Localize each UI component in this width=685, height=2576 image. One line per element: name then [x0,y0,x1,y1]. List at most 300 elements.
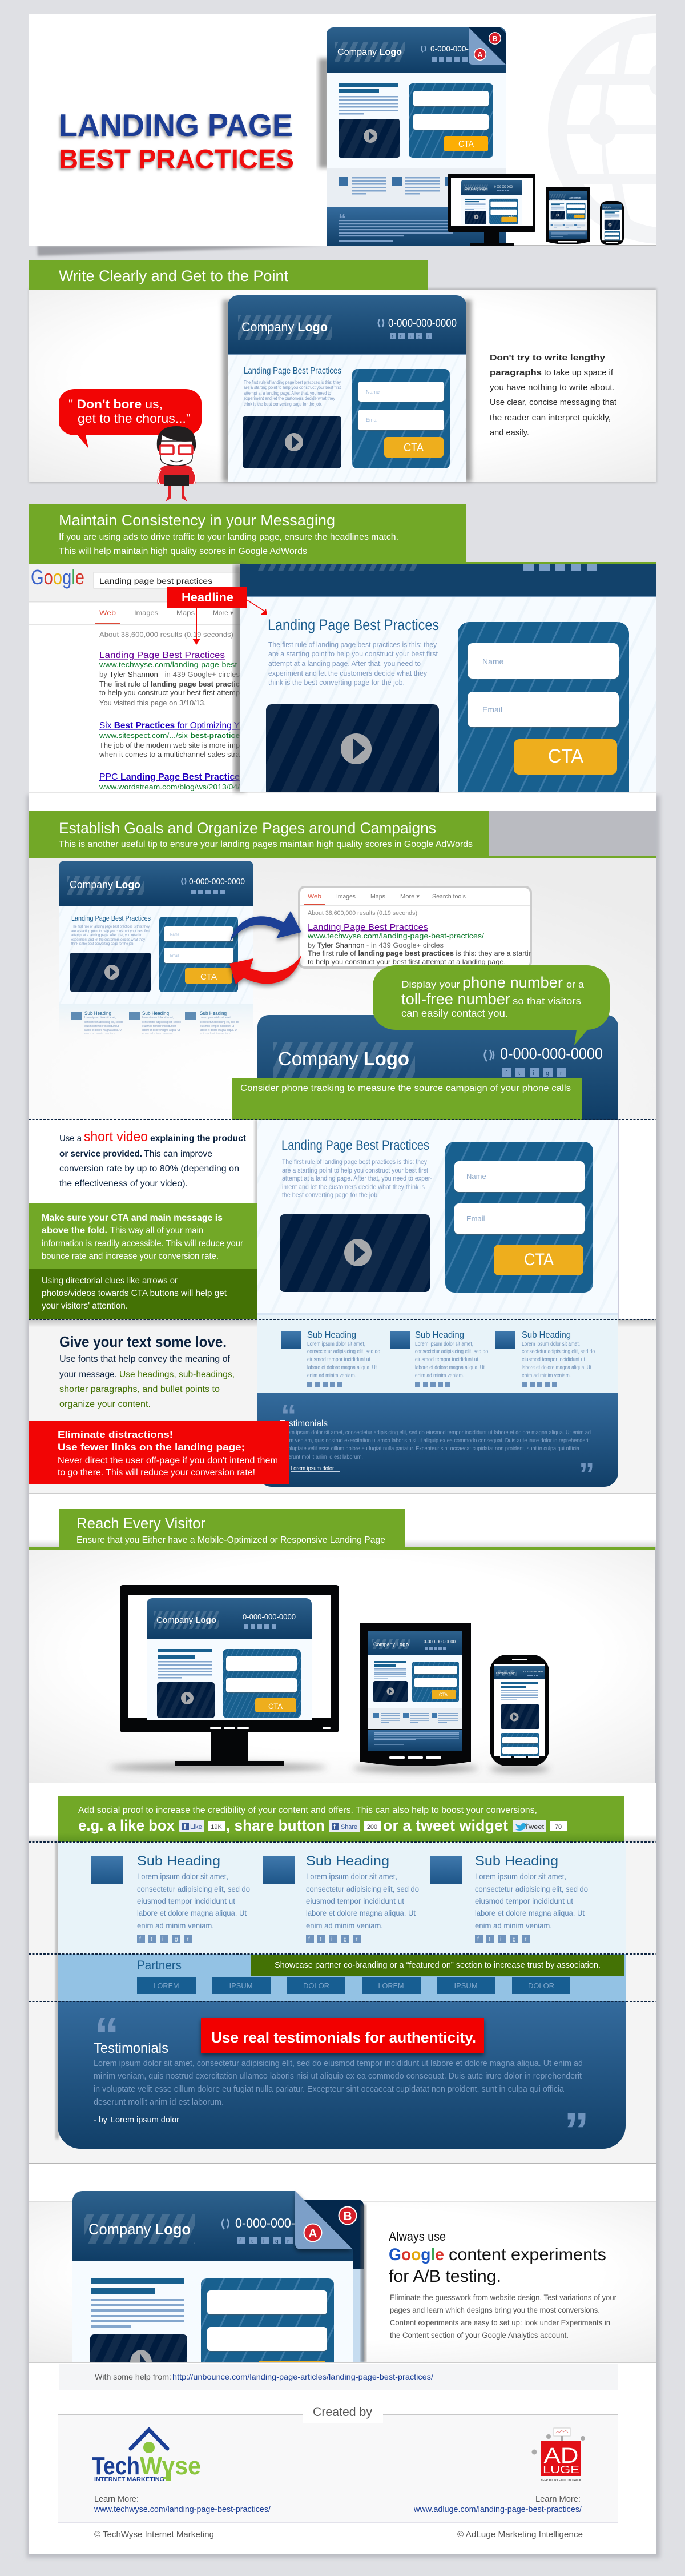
phone number speech bubble: phone number [462,974,563,991]
ab testing paragraph: Eliminate the guesswork from website design. Test variations of your [390,2293,616,2302]
sources box: http://unbounce.com/landing-page-articles/landing-page-best-practices/ [172,2372,433,2381]
google search results screenshot: You visited this page on 3/10/13. [99,699,206,707]
short video tip: This can improve [144,1149,212,1159]
small landing page mock: think is the best converting page for the job. [71,942,134,946]
bottom rule [29,1493,656,1494]
mock body column: Email [466,1214,485,1223]
sub heading columns: consectetur adipisicing elit, sed do [307,1349,380,1355]
landing page mock: CTA [404,442,424,454]
small landing page mock: Sub Heading [84,1010,111,1016]
like button widget [179,1820,225,1832]
short video tip: Use a [59,1134,82,1143]
share button widget: f [333,1823,336,1831]
sub heading columns [257,1319,618,1393]
sources box [59,2364,618,2390]
desktop monitor: 0-000-000-0000 [243,1612,296,1621]
search result card: www.techwyse.com/landing-page-best-practices/ [307,932,485,940]
paragraph: lengthy paragraphs: the reader can interpret quickly, [490,414,611,423]
testimonials block: - by [94,2115,107,2125]
text love tip: shorter paragraphs, and bullet points to [59,1385,220,1394]
google search results screenshot: Landing Page Best Practices [99,651,225,660]
variant badge A [474,48,486,61]
paragraph: lengthy paragraphs [490,354,616,438]
hero monitor: Company Logo [465,187,487,191]
learn more adluge [413,2494,582,2514]
sub heading columns: eiusmod tempor incididunt ut [522,1357,585,1363]
hero cast shadow [37,246,327,256]
section heading tab [29,811,656,858]
testimonials footer [257,1393,618,1492]
testimonials footer: minim veniam, quis nostrud exercitation ullamco laboris nisi ut aliquip ex ea commodo consequat. Duis aute irure dolor in reprehenderit [280,1438,590,1444]
panel: ab testing [29,2191,656,2363]
sub heading columns: consectetur adipisicing elit, sed do [522,1349,595,1355]
learn more techwyse: www.techwyse.com/landing-page-best-practices/ [94,2505,271,2514]
small landing page mock: enim ad minim veniam. [84,1032,116,1036]
eliminate distractions callout: Never direct the user off-page if you don't intend them [58,1456,278,1466]
sub headings band: Sub Heading [137,1853,220,1869]
google search results screenshot: Images [134,609,158,617]
learn more techwyse: Learn More: [94,2494,139,2504]
smartphone: Company Logo [496,1672,515,1675]
small landing page mock: Lorem ipsum dolor sit amet, [142,1016,174,1020]
large company header mock: Company Logo [278,1048,409,1070]
sub heading columns: Lorem ipsum dolor sit amet, [522,1341,580,1347]
eliminate distractions callout: Use fewer links on the landing page; [58,1442,245,1452]
section top shadow [29,1319,656,1327]
landing page mock: Landing Page Best Practices [244,366,341,376]
section heading tab: Ensure that you Either have a Mobile-Optimized or Responsive Landing Page [76,1535,385,1545]
small landing page mock [59,861,253,1040]
google search results screenshot: Six Best Practices for Optimizing Y [99,721,240,731]
created by label: Created by [313,2405,372,2419]
paragraph: lengthy paragraphs: and easily. [490,428,529,438]
testimonials block: Lorem ipsum dolor [111,2115,179,2125]
section heading tab: If you are using ads to drive traffic to your landing page, ensure the headlines match. [59,532,398,542]
like button widget: Like [190,1824,202,1831]
learn more adluge: www.adluge.com/landing-page-best-practices/ [413,2505,582,2514]
fold tip: This way all of your main [110,1226,203,1235]
learn more adluge: Learn More: [535,2494,581,2504]
google search results screenshot: by Tyler Shannon - in 439 Google+ circles [99,671,240,679]
ab testing paragraph: the Content section of your Google Analytics account. [390,2330,569,2340]
ab testing headline [389,2229,606,2286]
sub headings band: Sub Heading [306,1853,389,1869]
small landing page mock: consectetur adipisicing elit, sed do [142,1021,181,1024]
google search results screenshot: PPC Landing Page Best Practice [99,772,240,782]
fold tip: information is readily accessible. This will reduce your [42,1239,243,1249]
mock body column: CTA [524,1250,554,1269]
search result card: Web [308,893,321,900]
google search results screenshot: when it comes to a multichannel sales stra [99,751,240,759]
desktop monitor [120,1585,339,1766]
character with glasses [157,426,196,501]
large landing page mock: Landing Page Best Practices [268,616,439,633]
panel: write clearly [29,260,656,501]
social proof banner: or a tweet widget [383,1817,508,1834]
paragraph: lengthy paragraphs: you have nothing to write about. [490,383,615,392]
text love tip: Use headings, sub-headings, [119,1370,235,1379]
large landing page mock: CTA [548,745,583,767]
hero landing page mock shadow [319,58,330,168]
page section: sub headings partners testimonials [29,1842,656,2164]
small landing page mock: consectetur adipisicing elit, sed do [84,1021,123,1024]
red curved arrow [229,955,301,984]
sub headings band: Lorem ipsum dolor sit amet, [306,1872,397,1881]
social proof banner [58,1796,624,1842]
sub heading columns: eiusmod tempor incididunt ut [415,1357,478,1363]
mock body column: attempt at a landing page. After that, you need to exper- [282,1174,432,1182]
panel background [29,1550,655,1783]
sub heading columns: Lorem ipsum dolor sit amet, [307,1341,365,1347]
search result card: Maps [370,893,385,900]
co-branding strip: Showcase partner co-branding or a “featured on” section to increase trust by association. [275,1960,601,1970]
sub headings band: labore et dolore magna aliqua. Ut [137,1908,247,1917]
hero monitor [448,174,535,246]
sub headings band: consectetur adipisicing elit, sed do [137,1884,250,1893]
creators background [58,2414,618,2523]
text love tip: organize your content. [59,1399,151,1409]
hero baseline rule [514,245,656,246]
small landing page mock: enim ad minim veniam. [200,1032,231,1036]
sub headings band [58,1842,626,1954]
search result card: to help you construct your best first attempt at a landing page. [308,958,506,966]
phone number speech bubble: can easily contact you. [401,1008,508,1019]
white panel background [29,564,656,811]
paragraph: lengthy paragraphs: Don't try to write lengthy [490,354,605,363]
sub headings band: consectetur adipisicing elit, sed do [475,1884,588,1893]
sub headings band: ftigr [139,1936,189,1943]
section heading tab: Maintain Consistency in your Messaging [59,512,335,529]
testimonials footer: deserunt mollit anim id est laborum. [280,1454,363,1460]
panel: short video and fold [29,1120,656,1319]
sub heading columns: Lorem ipsum dolor sit amet, [415,1341,473,1347]
hero phone [600,201,624,245]
landing page mock: are a starting point to help you construct your best first [244,385,341,390]
panel: reach every visitor [29,1494,656,1783]
fold tip: Make sure your CTA and main message is [42,1213,223,1223]
mock body column: The first rule of landing page best practices is this: they [282,1158,427,1166]
ab testing headline: for A/B testing. [389,2267,501,2286]
white header band [29,1494,656,1547]
search result card: Landing Page Best Practices [308,922,428,932]
testimonials footer: Lorem ipsum dolor sit amet, consectetur adipisicing elit, sed do eiusmod tempor incididunt ut labore et dolore magna aliqua. Ut enim ad [280,1430,591,1436]
fold tip: bounce rate and increase your conversion rate. [42,1251,219,1261]
partners band: Partners [137,1958,182,1972]
section heading tab: Establish Goals and Organize Pages around Campaigns [59,820,436,837]
hero phone: Company Logo [603,207,611,209]
section heading tab [29,1509,655,1550]
small landing page mock: The first rule of landing page best practices is this: they [71,925,150,929]
hero landing page mock [327,27,506,246]
variant badge A: A [308,2227,317,2240]
small landing page mock: labore et dolore magna aliqua. Ut [142,1029,180,1032]
ab landing page mock [72,2191,353,2362]
partners band: IPSUM [229,1981,252,1990]
search result card: Images [336,893,356,900]
tablet: CTA [439,1692,448,1698]
search result card: The first rule of landing page best practices is this: they are a startir [308,949,531,957]
landing page mock: Company Logo [241,320,328,334]
hero monitor: 0-000-000-0000 [494,186,513,189]
eliminate distractions callout: Eliminate distractions! [58,1429,173,1440]
smartphone [490,1655,549,1766]
search result card: Search tools [432,893,466,900]
text love tip: your message. [59,1370,117,1379]
hero title [59,107,294,175]
testimonials footer: in voluptate velit esse cillum dolore eu fugiat nulla pariatur. Excepteur sint occaecat cupidatat non proident, sunt in culpa qui officia [280,1446,579,1452]
sub heading columns: labore et dolore magna aliqua. Ut [307,1365,377,1371]
like button widget: f [184,1823,187,1831]
small landing page mock: Sub Heading [200,1010,227,1016]
band shadow [29,1835,656,1842]
testimonials block: Testimonials [94,2040,168,2056]
small landing page mock: Sub Heading [142,1010,169,1016]
small landing page mock: Lorem ipsum dolor sit amet, [84,1016,116,1020]
variant badge A [304,2223,322,2242]
large company header mock: 0-000-000-0000 [500,1045,603,1062]
google search results screenshot: Web [99,609,116,617]
blue curved arrow [230,911,301,941]
learn more techwyse [94,2494,271,2514]
arrow to page headline [247,600,267,615]
hero landing page mock: CTA [458,139,474,149]
short video tip: or service provided. [59,1149,142,1159]
text love tip [59,1333,235,1409]
side gray background [29,1842,656,2163]
large landing page mock: The first rule of landing page best practices is this: they [268,641,437,649]
sub headings band: ftigr [308,1936,358,1943]
fold tip: above the fold. [42,1226,107,1235]
tweet button widget [513,1820,567,1832]
techwyse logo: Tech [92,2452,140,2480]
landing page mock: think is the best converting page for the job. [244,402,322,407]
column shadow [55,1842,59,2139]
google search results screenshot: to help you construct your best first attemp [99,689,240,697]
small landing page mock: Name [170,933,180,937]
ab landing page mock: 0-000-000- [235,2216,295,2230]
tweet button widget: Tweet [525,1824,544,1831]
desktop monitor: Company Logo [156,1615,216,1625]
small landing page mock: Landing Page Best Practices [71,914,151,922]
speech bubble [59,389,202,448]
white background [29,2363,656,2554]
small landing page mock: eiusmod tempor incididunt ut [142,1025,177,1028]
page B behind mock [304,2200,364,2362]
share button widget [329,1820,381,1832]
sub heading columns: enim ad minim veniam. [307,1373,356,1379]
small landing page mock: attempt at a landing page. After that, you need to [71,933,142,937]
small landing page mock: Email [170,954,179,958]
landing page mock: 0-000-000-0000 [388,318,457,330]
panel background [29,290,656,482]
sub heading columns: enim ad minim veniam. [415,1373,464,1379]
eliminate distractions callout [29,1421,289,1484]
variant badge B [338,2206,357,2225]
gray background [29,1319,656,1494]
hero monitor: CTA [509,215,514,218]
small landing page mock: Company Logo [70,879,140,890]
small landing page mock: enim ad minim veniam. [142,1032,174,1036]
short video tip: short video [84,1129,148,1145]
section heading tab: Write Clearly and Get to the Point [59,267,288,284]
testimonials block: deserunt mollit anim id est laborum. [94,2097,224,2107]
section heading tab [29,504,656,564]
hero tablet: Company Logo [550,198,566,201]
sub heading columns: labore et dolore magna aliqua. Ut [415,1365,485,1371]
sub headings band: enim ad minim veniam. [306,1921,383,1930]
sub headings band: consectetur adipisicing elit, sed do [306,1884,419,1893]
large landing page mock: Email [482,705,502,714]
sub headings band: Lorem ipsum dolor sit amet, [137,1872,228,1881]
variant badge A: A [477,50,483,59]
short video tip: the effectiveness of your video). [59,1179,188,1189]
techwyse logo [92,2430,201,2483]
sub heading columns: Sub Heading [522,1330,571,1340]
large company header mock [257,1015,618,1120]
variant badge B [489,32,501,45]
google search results screenshot: www.wordstream.com/blog/ws/2013/04/ [99,783,240,791]
hero panel [29,14,685,256]
sub heading columns: eiusmod tempor incididunt ut [307,1357,370,1363]
large landing page mock: think is the best converting page for the job. [268,679,405,687]
social proof banner: e.g. a like box [78,1817,175,1834]
section heading tab [29,260,428,290]
globe watermark [548,16,656,243]
sub headings band: labore et dolore magna aliqua. Ut [475,1908,585,1917]
techwyse logo: INTERNET MARKETING [94,2476,164,2483]
google search results screenshot: The job of the modern web site is more imp [99,741,240,749]
speech bubble: get to the chorus..." [78,411,191,426]
panel shadow [29,288,656,483]
headline callout [167,587,247,608]
sub headings band: eiusmod tempor incididunt ut [306,1896,404,1905]
paragraph: lengthy paragraphs: paragraphs [490,368,542,378]
search result card: About 38,600,000 results (0.19 seconds) [308,910,417,917]
creators bottom rule [58,2522,618,2523]
phone number speech bubble: or a [566,979,585,990]
panel background [29,858,656,1120]
panel: social proof [29,1783,656,1842]
ab testing paragraph: Content experiments are easy to set up: look under Experiments in [390,2318,610,2327]
mock shadow [234,564,245,792]
small landing page mock: 0-000-000-0000 [189,877,245,886]
eliminate distractions callout: to go there. This will reduce your conversion rate! [58,1468,255,1478]
landing page mock: attempt at a landing page. After that, you need to [244,391,331,396]
landing page mock: Email [366,417,379,423]
landing page mock shadow [223,300,472,482]
sub heading columns: enim ad minim veniam. [522,1373,571,1379]
phone tracking strip: Consider phone tracking to measure the source campaign of your phone calls [240,1084,571,1093]
mock body column: iment and let the customers decide what they think is [282,1183,425,1191]
ab landing page mock: Company Logo [88,2221,191,2238]
small landing page mock: labore et dolore magna aliqua. Ut [200,1029,238,1032]
section heading tab: This will help maintain high quality scores in Google AdWords [59,547,307,556]
adluge logo: AD [543,2444,579,2468]
short video tip [59,1129,246,1189]
tweet button widget: 70 [555,1824,562,1831]
desktop monitor: CTA [268,1702,283,1711]
partners band: LOREM [378,1981,404,1990]
paragraph: lengthy paragraphs: Use clear, concise messaging that [490,398,616,407]
like button widget: 19K [211,1824,222,1831]
sub heading columns: Sub Heading [415,1330,464,1340]
hero tablet [546,187,590,244]
google search results screenshot: The first rule of landing page best practic [99,680,240,688]
short video tip: conversion rate by up to 80% (depending on [59,1164,239,1174]
testimonials block: ” [564,2102,589,2158]
search result card [299,887,531,968]
google search results screenshot: Landing page best practices [99,576,212,585]
landing page mock: ftigr [392,334,429,339]
creators rule [58,2414,618,2415]
phone number speech bubble: so that visitors [513,996,581,1006]
section heading tab: Reach Every Visitor [76,1515,206,1532]
hero landing page mock: “ [339,210,346,227]
landing page mock [228,295,466,482]
small landing page mock: are a starting point to help you construct your best first [71,929,150,933]
testimonials block: minim veniam, quis nostrud exercitation ullamco laboris nisi ut aliquip ex ea commodo consequat. Duis aute irure dolor in reprehenderit [94,2071,582,2081]
section heading tab: This is another useful tip to ensure your landing pages maintain high quality scores in Google AdWords [59,840,473,849]
directional cues tip: your visitors' attention. [42,1301,128,1311]
ab testing headline: Always use [389,2229,446,2244]
google search results screenshot: www.techwyse.com/landing-page-best- [99,660,240,669]
hero title: LANDING PAGE [59,107,293,143]
sub headings band: Sub Heading [475,1853,558,1869]
small landing page mock: eiusmod tempor incididunt ut [200,1025,235,1028]
sub heading columns: labore et dolore magna aliqua. Ut [522,1365,591,1371]
large landing page mock: are a starting point to help you construct your best first [268,650,438,658]
hero landing page mock: Company Logo [337,47,402,57]
variant badge B: B [343,2210,352,2223]
testimonials footer: Testimonials [280,1419,328,1429]
sub headings band: enim ad minim veniam. [137,1921,214,1930]
directional cues tip [29,1269,257,1319]
large company header mock: ftigr [505,1070,562,1077]
white background [29,1120,656,1319]
phone number speech bubble: toll-free number [401,990,510,1008]
variant badge B: B [492,34,498,43]
real testimonials callout [201,2018,484,2053]
sub headings band: eiusmod tempor incididunt ut [475,1896,573,1905]
adluge logo: KEEP YOUR LEADS ON TRACK [541,2479,581,2482]
mock body column: are a starting point to help you construct your best first [282,1166,429,1174]
adluge logo [532,2428,585,2482]
sub headings band: eiusmod tempor incididunt ut [137,1896,235,1905]
share button widget: 200 [367,1824,377,1831]
dashed divider lines [29,1120,656,2001]
bottom rule [29,2362,656,2363]
hero title: BEST PRACTICES [59,145,294,175]
panel: establish goals [29,811,656,1120]
ab testing paragraph: pages and learn which designs bring you the most conversions. [390,2305,600,2314]
co-branding strip [251,1955,624,1976]
sub headings band: Lorem ipsum dolor sit amet, [475,1872,566,1881]
testimonials block: Lorem ipsum dolor sit amet, consectetur adipisicing elit, sed do eiusmod tempor incididunt ut labore et dolore magna aliqua. Ut enim ad [94,2059,583,2068]
panel: maintain consistency [29,504,656,811]
tablet: 0-000-000-0000 [424,1639,456,1644]
small landing page mock: experiment and let the customers decide what they [71,938,146,942]
search result card: More ▾ [400,893,420,900]
sub headings band: ftigr [477,1936,527,1943]
fold tip [29,1203,257,1269]
sources box: With some help from: [95,2372,171,2381]
adluge logo: LUGE [543,2464,579,2475]
ab mock shadow [361,2205,366,2362]
testimonials footer: ” [579,1456,595,1492]
small landing page mock: labore et dolore magna aliqua. Ut [84,1029,123,1032]
ab testing headline: Google [389,2245,444,2264]
google search results screenshot: About 38,600,000 results (0.19 seconds) [99,631,233,639]
